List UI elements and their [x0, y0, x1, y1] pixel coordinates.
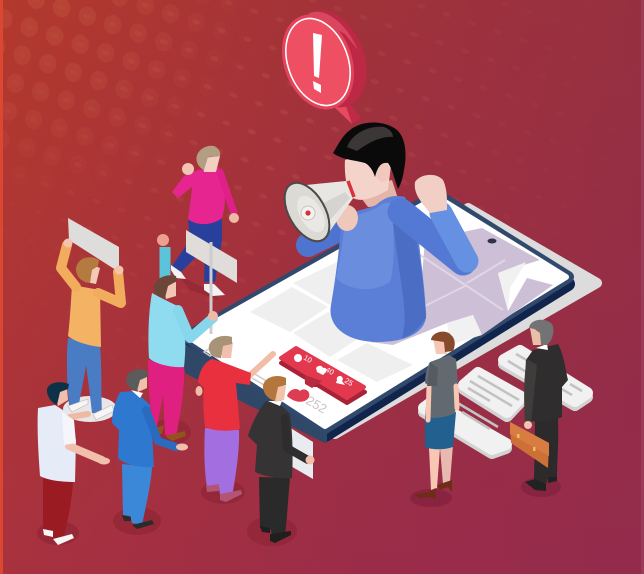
- bubble depth: [283, 1, 379, 117]
- pants: [43, 478, 73, 540]
- hand behind: [196, 386, 202, 396]
- small screen marks: [204, 347, 268, 385]
- floor plate: [63, 396, 117, 422]
- megaphone: [275, 175, 354, 249]
- person: orange shirt: [61, 218, 124, 422]
- like count: 252: [303, 393, 330, 416]
- hand: [176, 444, 188, 450]
- person: pink sweater: [171, 146, 239, 300]
- sleeve: [427, 362, 438, 386]
- upper arm: [401, 212, 463, 262]
- raised arm: [160, 247, 170, 282]
- shoes: [525, 477, 557, 491]
- hands: [182, 163, 194, 175]
- notification badge: 40: [324, 365, 336, 377]
- arm behind megaphone: [308, 228, 342, 245]
- raised fist: [157, 234, 169, 246]
- chat bubbles: [424, 351, 587, 453]
- face: [85, 262, 100, 284]
- ground shadow: [410, 489, 452, 507]
- pants: [204, 428, 239, 497]
- hand on megaphone: [336, 205, 358, 231]
- face: [163, 282, 176, 299]
- person: cyan sweater: [148, 234, 218, 445]
- front camera: [488, 238, 496, 244]
- exclamation mark: [313, 33, 322, 78]
- hair: [431, 332, 455, 352]
- person: red shirt: [196, 336, 273, 504]
- ground shadow: [37, 521, 79, 545]
- hand: [524, 421, 532, 429]
- sweater: [148, 293, 185, 367]
- protest sign with pole: [186, 230, 237, 334]
- face: [345, 150, 391, 200]
- phone: [183, 195, 597, 441]
- pants: [122, 464, 152, 525]
- ear: [376, 162, 390, 182]
- face: [202, 156, 220, 172]
- jacket: [248, 401, 293, 478]
- arm behind: [70, 414, 88, 417]
- raised fist: [415, 175, 447, 213]
- shoes: [43, 529, 74, 545]
- shoes: [260, 526, 291, 543]
- hair: [209, 336, 232, 358]
- phone lower-left edge: [183, 345, 325, 441]
- ground shadow: [247, 516, 297, 546]
- alert speech bubble: [269, 1, 379, 124]
- legs: [429, 448, 440, 490]
- raised sign: [68, 218, 119, 272]
- person: black suit: [247, 376, 314, 546]
- person: man with briefcase: [510, 320, 568, 497]
- jacket: [112, 391, 154, 467]
- jacket arm: [285, 418, 308, 460]
- hair highlight: [347, 127, 393, 151]
- sweater: [172, 167, 225, 224]
- phone screen: [189, 197, 566, 426]
- ground shadow: [201, 480, 245, 504]
- jacket arm: [146, 410, 176, 447]
- jacket sleeve: [524, 359, 537, 423]
- hair: [196, 146, 220, 170]
- shoes: [171, 265, 225, 296]
- shoes: [68, 399, 114, 420]
- hair: [529, 320, 553, 345]
- bubble ring: [274, 9, 362, 115]
- collar: [131, 390, 143, 398]
- sleeve: [62, 412, 76, 445]
- skirt: [425, 412, 456, 449]
- shoes: [414, 480, 452, 500]
- hair: [126, 369, 148, 391]
- pointing arm: [249, 354, 273, 376]
- person: white t-shirt: [37, 382, 110, 545]
- forearm: [441, 213, 467, 261]
- phone rim: [187, 195, 568, 428]
- screen grid cells: [250, 262, 413, 382]
- jacket: [525, 344, 568, 422]
- face: [530, 328, 542, 345]
- face: [433, 338, 447, 354]
- hair: [333, 122, 406, 189]
- notification badge: [281, 348, 365, 403]
- ground shadow: [178, 275, 220, 300]
- shadow grid lines: [420, 255, 505, 310]
- face: [135, 376, 147, 392]
- hand: [98, 458, 110, 464]
- ground shadow: [521, 477, 561, 497]
- person: blue suit: [112, 369, 188, 535]
- hair: [76, 257, 99, 283]
- collar: [268, 401, 282, 406]
- notification badge: 25: [343, 376, 355, 388]
- arms: [61, 245, 121, 303]
- shirt: [198, 359, 251, 431]
- pants: [259, 477, 290, 535]
- arms: [428, 386, 457, 420]
- pants: [67, 338, 102, 413]
- heart icon: [287, 389, 309, 402]
- face: [52, 388, 68, 406]
- paper: [289, 427, 313, 479]
- pants: [534, 418, 558, 484]
- ground shadow: [113, 507, 161, 535]
- phone base shadow plate: [300, 208, 597, 434]
- pants: [148, 360, 184, 437]
- phone body side: [187, 201, 568, 435]
- forearm: [69, 446, 102, 460]
- hair: [154, 275, 177, 298]
- hair: [47, 382, 69, 405]
- chest light: [336, 203, 394, 289]
- pointing arm: [178, 310, 213, 338]
- torso: [330, 196, 426, 342]
- torso fold: [392, 210, 426, 338]
- hair: [263, 376, 286, 401]
- shirt: [38, 405, 76, 482]
- hand: [208, 311, 218, 321]
- hand: [306, 456, 314, 464]
- neck: [355, 180, 400, 207]
- face: [220, 342, 233, 358]
- briefcase: [510, 422, 549, 468]
- light shards on screen: [447, 262, 526, 345]
- pants: [172, 218, 222, 282]
- top: [425, 355, 458, 418]
- hands: [64, 238, 72, 248]
- bubble tail: [332, 98, 361, 124]
- man with megaphone: [275, 122, 467, 342]
- arm: [220, 172, 234, 213]
- collar: [536, 344, 548, 350]
- shoes: [155, 425, 186, 441]
- man's cast shadow: [370, 228, 553, 345]
- notification badge: 10: [302, 353, 314, 365]
- ground shadow: [149, 419, 191, 445]
- bubble face: [269, 4, 367, 120]
- shirt: [68, 285, 101, 347]
- face: [272, 384, 286, 402]
- person: woman in skirt: [410, 332, 458, 507]
- shoes: [122, 515, 154, 529]
- shoes: [206, 484, 242, 502]
